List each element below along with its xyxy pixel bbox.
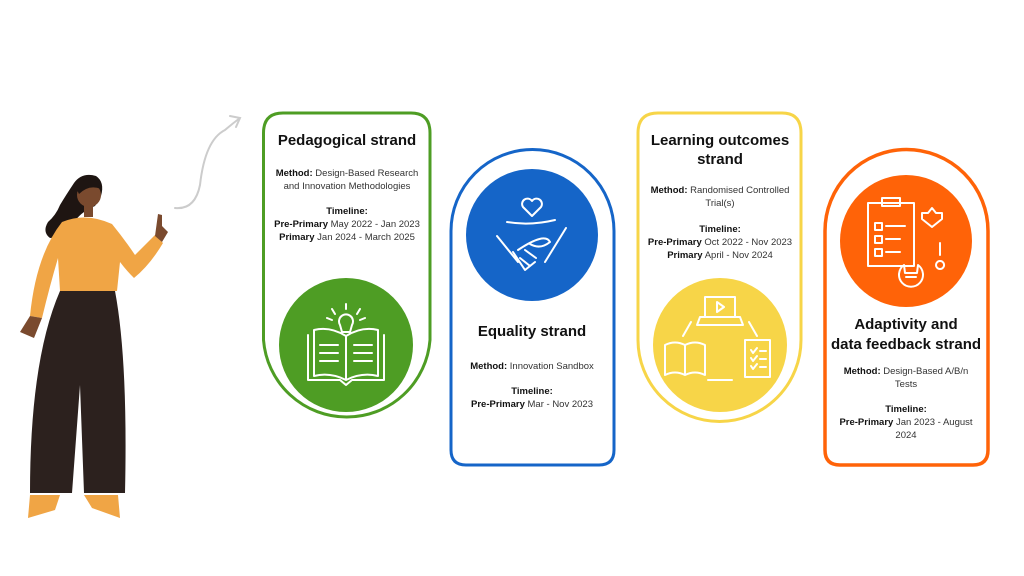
text block: learning outcomes details: Primary April - Nov 2024 (667, 250, 773, 261)
text block: equality details: Pre-Primary Mar - Nov 2023 (471, 399, 593, 410)
text block: equality details: Timeline: (511, 386, 553, 397)
person illustration (20, 175, 168, 518)
text block: learning outcomes details: Timeline: (699, 224, 741, 235)
text block: pedagogical details: Primary Jan 2024 - March 2025 (279, 232, 415, 243)
text block: learning outcomes details: Trial(s) (705, 198, 735, 209)
text block: learning outcomes details: Pre-Primary Oct 2022 - Nov 2023 (648, 237, 792, 248)
heading: learning outcomes: strand (697, 151, 743, 168)
icon: book with lightbulb (279, 278, 413, 412)
icon: handshake with heart (466, 169, 598, 301)
text block: pedagogical details: and Innovation Methodologies (284, 181, 411, 192)
text block: pedagogical details: Method: Design-Based Research (276, 168, 418, 179)
heading: learning outcomes: Learning outcomes (651, 132, 789, 149)
heading: pedagogical: Pedagogical strand (278, 132, 416, 149)
heading: adaptivity: data feedback strand (831, 336, 981, 353)
text block: adaptivity details: 2024 (895, 430, 917, 441)
icon: clipboard gear bulb (840, 175, 972, 307)
text block: pedagogical details: Pre-Primary May 2022 - Jan 2023 (274, 219, 420, 230)
text block: adaptivity details: Method: Design-Based A/B/n (844, 366, 968, 377)
heading: equality: Equality strand (478, 323, 586, 340)
icon: learning cycle (653, 278, 787, 412)
arrow (175, 116, 240, 208)
panel: learning outcomes strand (638, 113, 801, 421)
text block: adaptivity details: Pre-Primary Jan 2023 - August (839, 417, 973, 428)
text block: learning outcomes details: Method: Randomised Controlled (651, 185, 789, 196)
text block: adaptivity details: Timeline: (885, 404, 927, 415)
panel: pedagogical strand (264, 113, 430, 417)
heading: adaptivity: Adaptivity and (854, 316, 958, 333)
text block: pedagogical details: Timeline: (326, 206, 368, 217)
text block: adaptivity details: Tests (895, 379, 917, 390)
panel: equality strand (451, 150, 614, 465)
panel: adaptivity strand (825, 150, 988, 465)
text block: equality details: Method: Innovation Sandbox (470, 361, 594, 372)
